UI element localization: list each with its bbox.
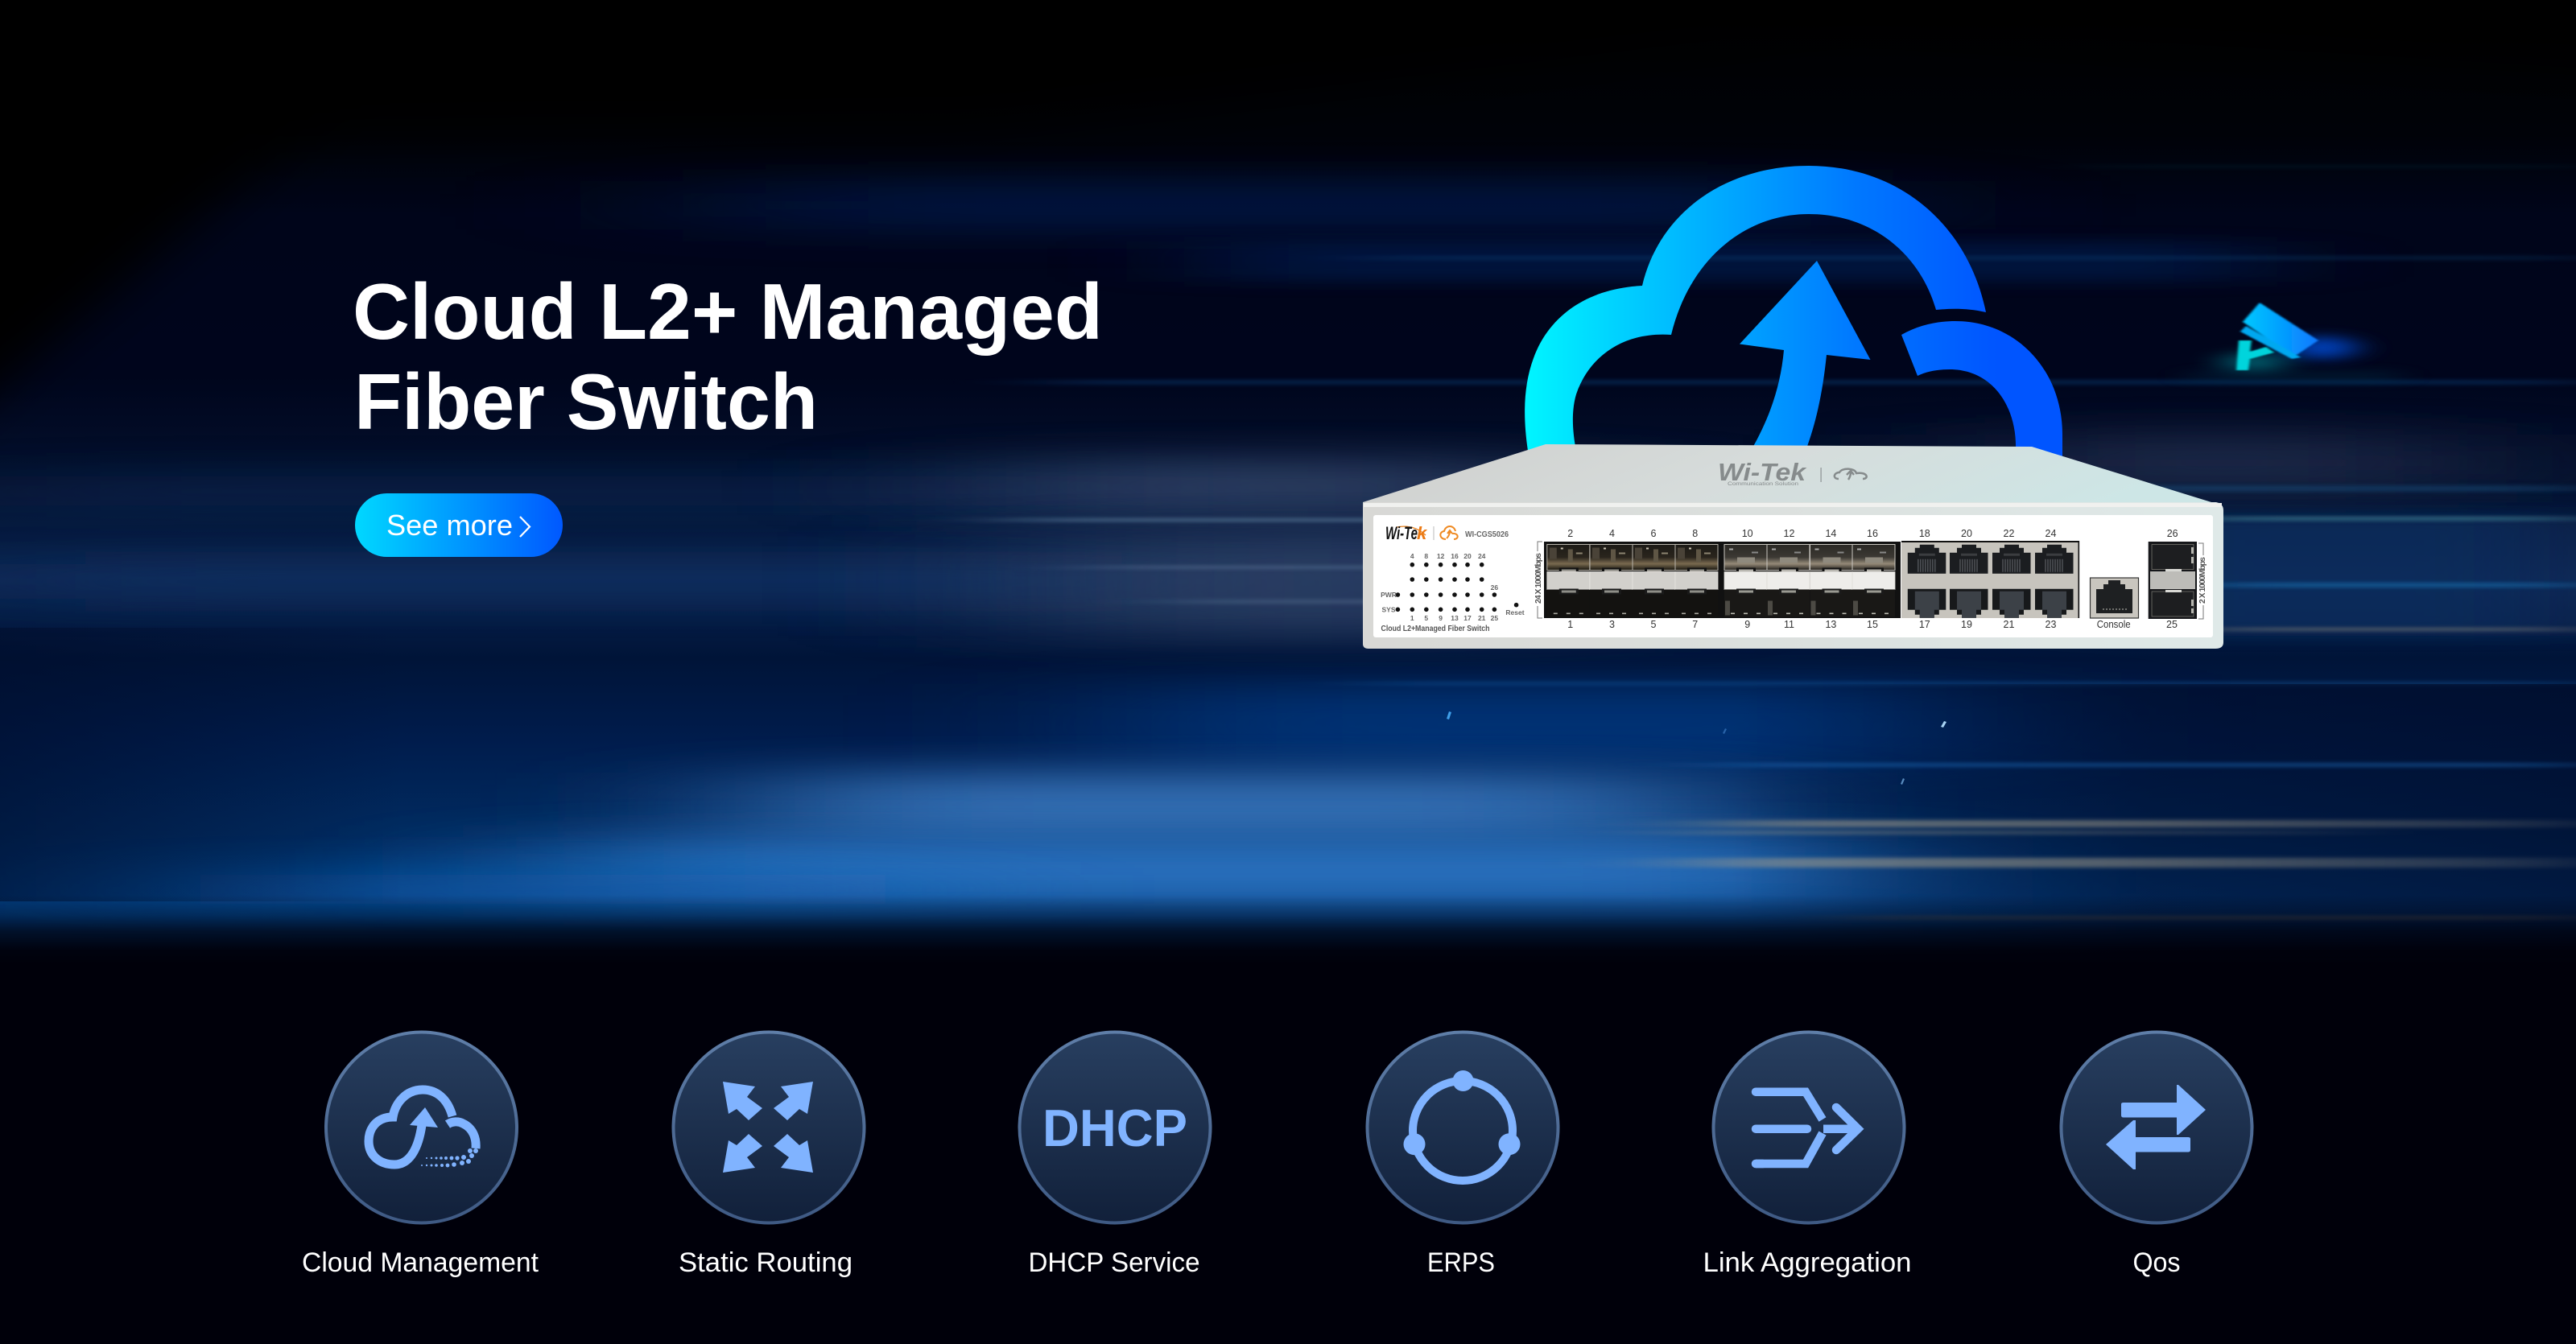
product name: Cloud L2+Managed Fiber Switch — [1381, 624, 1489, 633]
icon: surveillance camera — [2190, 303, 2399, 380]
icon: ring with three nodes — [1404, 1070, 1520, 1181]
port numbers: 4 — [1609, 528, 1615, 539]
specks — [1447, 711, 1451, 719]
front logo: Wi-Te — [1385, 523, 1418, 543]
status LEDs — [1396, 563, 1518, 612]
feature: link aggregation — [1703, 1032, 1911, 1278]
corners — [0, 0, 564, 451]
speed label: 2 x 1000Mbps — [2198, 543, 2207, 619]
port numbers: 15 — [1867, 619, 1878, 630]
feature: qos — [2061, 1032, 2252, 1278]
port numbers: Console — [2097, 619, 2131, 630]
LED labels: 20 — [1463, 552, 1472, 560]
port numbers: 8 — [1692, 528, 1698, 539]
LED labels: PWR — [1381, 591, 1397, 599]
port numbers: 14 — [1825, 528, 1836, 539]
port numbers: 12 — [1784, 528, 1794, 539]
mid band grey-blue — [0, 475, 1208, 507]
port numbers: 11 — [1784, 619, 1794, 630]
lower bright band — [1127, 684, 1972, 765]
front logo — [1385, 523, 1509, 543]
24 SFP port block — [1544, 542, 1901, 618]
RJ45 port block — [1901, 541, 2079, 618]
port numbers: 21 — [2004, 619, 2014, 630]
uplink SFP ports — [2149, 542, 2197, 619]
button: see more — [355, 493, 563, 557]
port numbers: 18 — [1919, 528, 1930, 539]
front logo: WI-CGS5026 — [1465, 530, 1509, 539]
side dimming — [1731, 684, 2576, 958]
port numbers: 17 — [1919, 619, 1930, 630]
label: Link Aggregation — [1703, 1247, 1911, 1278]
feature: dhcp service — [1019, 1032, 1211, 1278]
network switch — [1363, 444, 2223, 649]
port numbers: 19 — [1961, 619, 1972, 630]
switch front bezel — [1363, 502, 2223, 649]
LED labels: 13 — [1451, 614, 1459, 622]
LED labels: SYS — [1381, 605, 1396, 613]
LED labels: 12 — [1437, 552, 1445, 560]
port numbers: 16 — [1867, 528, 1878, 539]
disc — [673, 1032, 865, 1223]
port numbers: 20 — [1961, 528, 1972, 539]
port numbers: 1 — [1567, 619, 1573, 630]
port numbers: 23 — [2046, 619, 2056, 630]
port numbers: 2 — [1567, 528, 1573, 539]
title: Cloud L2+ Managed — [353, 267, 1103, 356]
feature: erps — [1367, 1032, 1558, 1278]
icon: four corner arrows — [723, 1082, 813, 1173]
console port — [2090, 578, 2138, 618]
icon: two-way arrows — [2106, 1085, 2206, 1169]
speed label: 2 x 1000Mbps: 2 X 1000Mbps — [2198, 557, 2207, 604]
speed label: 24 x 1000Mbps: 24 X 1000Mbps — [1534, 553, 1543, 604]
port numbers: 5 — [1651, 619, 1657, 630]
disc — [326, 1032, 517, 1223]
LED labels: 4 — [1410, 552, 1414, 560]
icon: cloud with upload arrow — [369, 1090, 478, 1167]
lid logo — [1718, 458, 1867, 487]
port numbers: 25 — [2166, 619, 2178, 630]
top band — [724, 181, 1852, 229]
LED labels: 26 — [1491, 583, 1498, 592]
port numbers: 3 — [1609, 619, 1615, 630]
label: Cloud Management — [302, 1247, 539, 1278]
front logo: k — [1417, 523, 1428, 543]
LED labels: 24 — [1478, 552, 1486, 560]
label: Static Routing — [679, 1247, 852, 1278]
port numbers: 22 — [2004, 528, 2014, 539]
port numbers — [1567, 528, 2178, 630]
switch lid — [1363, 444, 2222, 515]
port numbers: 9 — [1744, 619, 1750, 630]
LED labels: 16 — [1451, 552, 1459, 560]
icon: DHCP: DHCP — [1042, 1099, 1187, 1157]
feature: cloud management — [302, 1032, 539, 1278]
label: ERPS — [1427, 1247, 1495, 1278]
port numbers: 7 — [1692, 619, 1698, 630]
tan streaks — [1650, 820, 2576, 827]
bottom fade — [0, 895, 2576, 964]
feature: static routing — [673, 1032, 865, 1278]
LED labels: 8 — [1424, 552, 1428, 560]
LED labels: 25 — [1491, 614, 1498, 622]
LED labels: 21 — [1478, 614, 1486, 622]
port numbers: 26 — [2167, 528, 2178, 539]
port numbers: 13 — [1825, 619, 1836, 630]
port numbers: 6 — [1651, 528, 1657, 539]
LED labels: 5 — [1424, 614, 1428, 622]
title — [353, 267, 1103, 446]
label: DHCP Service — [1029, 1247, 1199, 1278]
port numbers: 10 — [1742, 528, 1753, 539]
LED labels — [1381, 552, 1525, 622]
LED labels: 9 — [1439, 614, 1443, 622]
lid logo: Communication Solution — [1728, 482, 1798, 487]
icon: merging links arrow — [1756, 1092, 1858, 1164]
big cloud with upload arrow — [1525, 166, 2062, 463]
disc — [1367, 1032, 1558, 1223]
lid logo: Wi-Tek — [1718, 458, 1807, 486]
disc — [1019, 1032, 1211, 1223]
LED labels: Reset — [1505, 608, 1525, 616]
LED labels: 17 — [1463, 614, 1472, 622]
button: see more: See more — [386, 509, 513, 542]
LED labels: 1 — [1410, 614, 1414, 622]
label: Qos — [2133, 1247, 2180, 1278]
disc — [1713, 1032, 1905, 1223]
port numbers: 24 — [2046, 528, 2056, 539]
speed label: 24 x 1000Mbps — [1533, 542, 1543, 618]
title: Fiber Switch — [354, 357, 818, 446]
disc — [2061, 1032, 2252, 1223]
